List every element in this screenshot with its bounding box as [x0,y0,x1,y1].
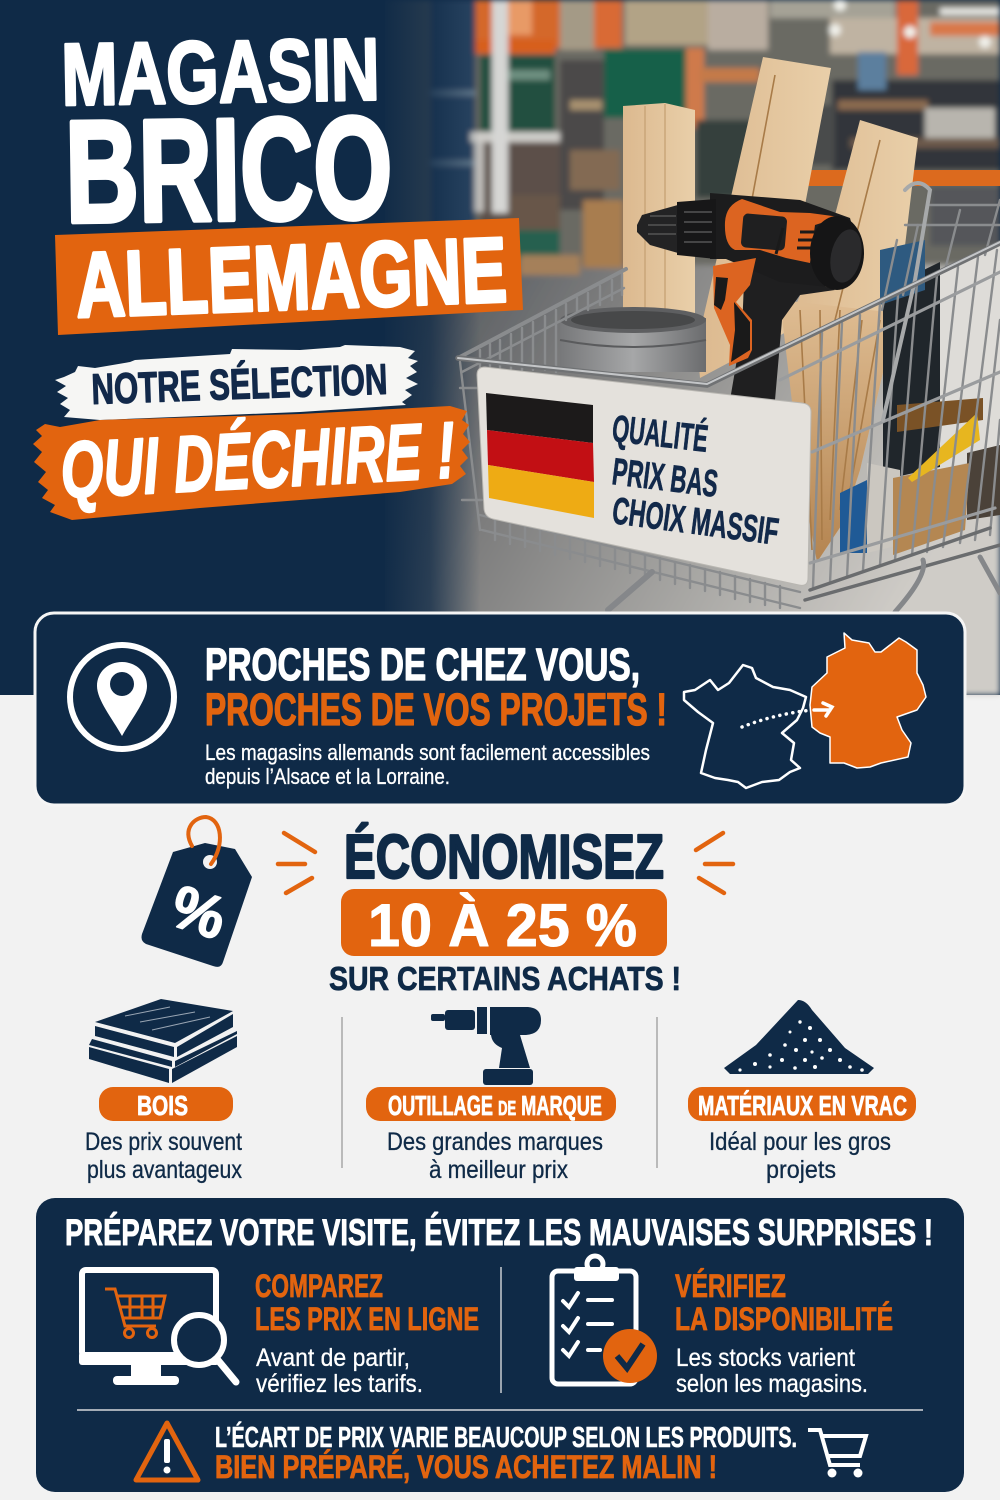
brush label: qui déchire [33,405,470,520]
title: Magasin Brico: MAGASIN [61,19,380,124]
sign text: QUALITÉ [610,406,710,461]
subheading: SUR CERTAINS ACHATS ! [329,960,681,997]
block: vérifiez la disponibilité [675,1268,893,1398]
sign text: CHOIX MASSIF [610,490,781,554]
icon: wood planks [89,999,237,1083]
brush label: notre sélection: NOTRE SÉLECTION [91,356,388,414]
label [688,1087,916,1121]
panel: préparez votre visite [36,1198,964,1492]
brush label: qui déchire: QUI DÉCHIRE ! [58,405,457,515]
column: bois [85,999,242,1184]
description [709,1128,891,1184]
block: comparez les prix: Avant de partir, [256,1344,410,1372]
sign text [610,406,781,554]
title: Magasin Brico: BRICO [64,86,393,253]
cart sign [477,367,811,585]
block: comparez les prix: COMPAREZ [255,1268,383,1304]
icon: monitor with cart and magnifier [79,1270,236,1385]
icon: shopping cart [808,1430,866,1478]
heading: PROCHES DE CHEZ VOUS, [205,639,640,690]
label [99,1087,233,1121]
description: depuis l’Alsace et la Lorraine. [205,764,450,789]
panel: proches de chez vous [35,613,965,805]
heading: PROCHES DE VOS PROJETS ! [205,684,667,735]
icon: drill [431,1007,541,1085]
icon: price tag: % [163,872,234,952]
cordless drill [637,193,866,400]
orange cart rail [808,170,1000,186]
brush label: notre sélection [55,345,418,420]
flag of Germany [486,393,594,518]
block: vérifiez la disponibilité: LA DISPONIBILITÉ [675,1301,893,1337]
cart wire basket [458,183,1000,612]
badge: 10 à 25 %: 10 À 25 % [368,892,637,959]
warning text [215,1420,797,1485]
description: Des grandes marques [387,1128,603,1156]
rays [278,833,733,893]
column: outillage [366,1007,616,1184]
description: Idéal pour les gros [709,1128,891,1156]
icon: price tag [142,817,252,967]
banner: Allemagne: ALLEMAGNE [74,219,508,337]
block: vérifiez la disponibilité: selon les magasins. [676,1370,868,1398]
products in cart [840,240,1000,555]
paint can [560,307,706,372]
label: MATÉRIAUX EN VRAC [698,1090,907,1121]
block: vérifiez la disponibilité: Les stocks varient [676,1344,855,1372]
column: matériaux [688,1000,916,1184]
icon: gravel pile [724,1000,874,1074]
dividers [342,1017,657,1168]
savings section [142,817,733,997]
wooden planks [623,57,918,562]
block: comparez les prix: vérifiez les tarifs. [256,1370,423,1398]
label: BOIS [137,1090,188,1121]
hero panel [0,0,1000,695]
description: à meilleur prix [429,1156,568,1184]
icon: warning triangle [136,1423,198,1480]
fade to navy [380,0,480,695]
shopping cart with products [458,57,1000,612]
description: Les magasins allemands sont facilement accessibles [205,740,650,765]
description [85,1128,242,1184]
block: comparez les prix [255,1268,479,1398]
label: OUTILLAGE DE MARQUE [388,1090,602,1121]
description: plus avantageux [87,1156,242,1184]
warning text: BIEN PRÉPARÉ, VOUS ACHETEZ MALIN ! [215,1449,717,1485]
description: Des prix souvent [85,1128,242,1156]
icon: location pin [70,645,174,749]
heading: économisez: ÉCONOMISEZ [344,823,664,892]
store photo background [380,0,1000,695]
description: projets [766,1156,836,1184]
description [387,1128,603,1184]
title: Magasin Brico [61,19,393,253]
block: vérifiez la disponibilité: VÉRIFIEZ [675,1268,786,1304]
block: comparez les prix: LES PRIX EN LIGNE [255,1301,479,1337]
map: France to Germany [684,633,926,788]
sign text: PRIX BAS [610,451,720,506]
heading [205,639,667,735]
description [205,740,650,789]
icon: clipboard with check [552,1256,657,1384]
